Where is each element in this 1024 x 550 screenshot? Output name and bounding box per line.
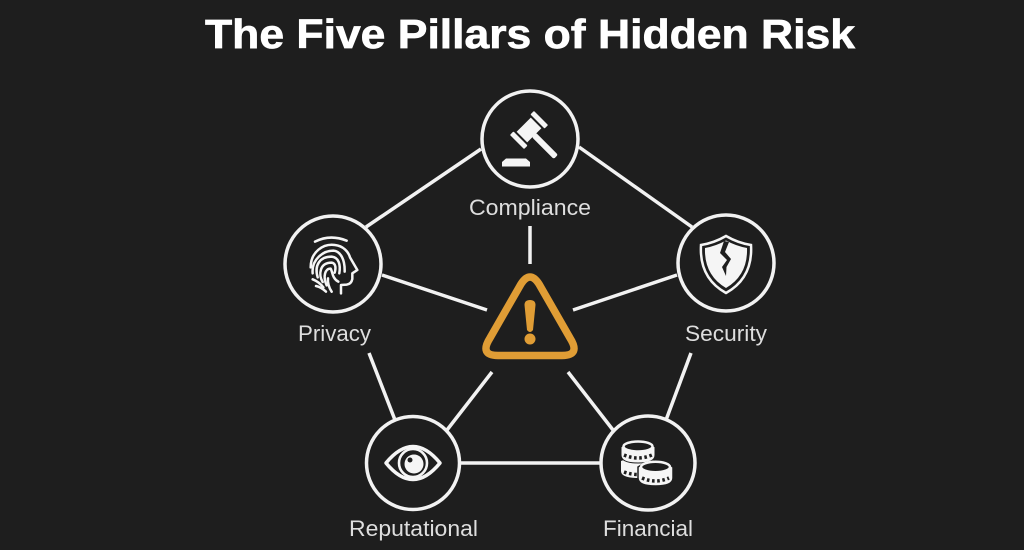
- pillar: privacy: [285, 216, 381, 346]
- title: The Five Pillars of Hidden Risk: [205, 11, 855, 57]
- pillar: reputational: [349, 416, 478, 541]
- pillar: financial: [601, 416, 695, 541]
- lower left coin: [621, 458, 655, 478]
- icon: coin stacks: [621, 440, 673, 486]
- connector lines: [366, 147, 692, 463]
- icon: cracked shield: [701, 236, 751, 293]
- icon: gavel: [502, 111, 568, 169]
- right coin stack: [638, 461, 673, 486]
- pillar: security: [678, 215, 774, 346]
- label: reputational: Reputational: [349, 516, 478, 541]
- pillar: compliance: [469, 91, 591, 220]
- label: privacy: Privacy: [298, 321, 371, 346]
- label: security: Security: [685, 321, 767, 346]
- label: compliance: Compliance: [469, 195, 591, 220]
- upper left coin: [621, 440, 655, 463]
- icon: eye: [386, 446, 440, 480]
- label: financial: Financial: [603, 516, 693, 541]
- icon: central warning triangle: [486, 277, 574, 356]
- icon: fingerprint head: [311, 238, 357, 293]
